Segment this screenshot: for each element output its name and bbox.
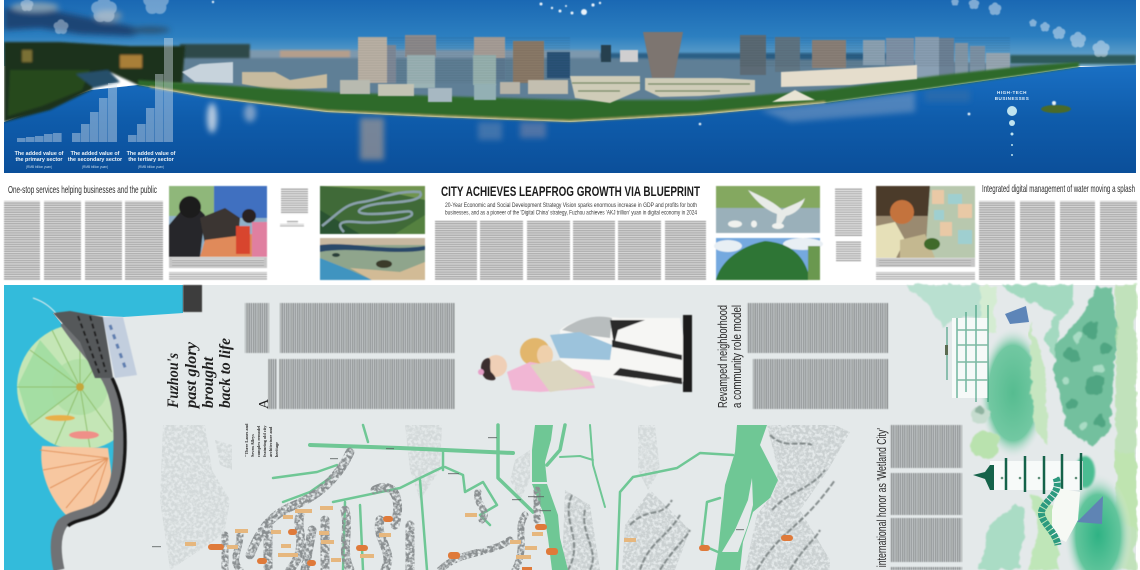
map: pale sketched hills [160,425,660,570]
icons: sparkle cluster at top centre [212,1,601,15]
watercolour: right edge grass strip [1116,285,1136,570]
watercolour: forest island [1055,287,1118,447]
photo: banyan tree [714,238,823,280]
text block: water management article columns [979,201,1137,280]
photo: clouds [4,2,170,36]
drop cap: A [257,398,272,409]
heading: revamped neighborhood: Revamped neighborhood [715,305,730,408]
photo: low-rise buildings left [182,62,327,90]
map: orange district labels [208,516,793,570]
watercolour: pale reed strip [1030,320,1048,445]
chart: high-tech businesses bubbles: HIGH-TECH [997,90,1027,95]
photo: egrets in a wetland [716,186,820,233]
text block: headline deck: businesses, and as a pioneer of the 'Digital China' strategy, Fuzhou achieves 'AKJ trillion' yuan in digital economy in 2024 [445,210,698,216]
icons: flower data markers, left [21,0,169,34]
chart: high-tech businesses bubbles: BUSINESSES [995,96,1029,101]
icon: orange parasol [40,446,112,517]
photo: coastal bay aerial [320,238,425,280]
text block: Three Lanes pull quote: complex remodel [256,425,261,457]
text block: paper craft credit [876,272,975,280]
photo: sky [4,0,1136,66]
icon: blue banner one [1005,306,1029,324]
text block: Three Lanes pull quote [244,423,279,457]
text block: revamped neighborhood article [747,303,888,409]
photo: far skyline [180,44,1136,65]
text block: Three Lanes pull quote: Seven Alleys [250,434,255,457]
watercolour: middle pale bushes [971,405,999,459]
illustration: temple hall [945,305,988,402]
chart: added value of the tertiary sector [127,38,176,169]
chart: added value of the primary sector: the primary sector [15,157,63,163]
map: green waterways [273,425,733,570]
map: tiny place name ticks [152,437,744,547]
photo: people at a service counter [169,186,267,257]
photo: mid-distance city behind the waterfront [180,56,1046,102]
photo: left forest [4,42,185,122]
watercolour: upper pale washes [905,285,1073,360]
chart: added value of the secondary sector: The added value of [71,151,120,157]
photo: waterfront towers [358,32,1010,88]
chart: added value of the primary sector: The added value of [15,151,64,157]
illustration: watercolour wetland landscape [905,285,1136,570]
heading: Fuzhou's past glory brought back to life: Fuzhou's [165,353,182,409]
chart: added value of the tertiary sector: (RMB billion yuan) [138,165,164,169]
heading: revamped neighborhood: a community role model [729,305,744,408]
text block: Three Lanes pull quote: "Three Lanes and [244,423,249,457]
chart: added value of the secondary sector [68,83,123,169]
text block: Three Lanes pull quote: heritage [274,442,279,457]
illustration: arched bridge [1041,478,1058,545]
panel background [4,285,1136,570]
map: mountains base shading [562,425,850,570]
caption: paper craft photo [876,258,975,267]
photo: river water [4,65,1136,173]
text block: Fuzhou's past glory article [245,303,455,409]
photo: winding road aerial [320,186,425,234]
illustration: mother and child figures [478,315,692,392]
text block: one-stop services article columns [4,201,163,280]
text block: pull quote and attribution [835,188,862,262]
text block: main article columns [435,221,706,280]
heading: revamped neighborhood [715,305,744,408]
chart: added value of the primary sector [15,133,64,169]
map: river island [722,478,753,552]
chart: high-tech businesses bubbles [995,90,1029,156]
chart: added value of the secondary sector: (RMB billion yuan) [82,165,108,169]
heading: Fuzhou's past glory brought back to life [165,338,234,410]
chart: added value of the secondary sector: the secondary sector [68,157,123,163]
caption: service counter photo [169,257,267,268]
panel: teal wall backdrop [4,285,183,570]
photo: small island and swans [699,101,1071,125]
icon: blue banner two [1077,496,1103,524]
photo: shoreline trees and embankment [138,62,1079,122]
photo: low-rise terraces [340,65,917,103]
icon: grey tiled wall curve [33,285,202,570]
map: Fuzhou waterways and old city [152,425,850,570]
map: inked mountain ridges [568,435,835,570]
text block: Three Lanes pull quote: architecture and [268,426,273,457]
photo: woman making paper crafts [876,186,975,258]
icons: flower data markers, right [951,0,1110,57]
panel: rotated heritage and wetland spread [4,285,1136,570]
text block: photo credit [169,272,267,280]
chart: added value of the tertiary sector: The added value of [127,151,176,157]
map: tan place labels [185,506,636,562]
text block: wetland city article [890,425,962,570]
heading: main front-page headline: CITY ACHIEVES LEAPFROG GROWTH VIA BLUEPRINT [441,183,700,199]
panel: skyline photo with economic charts [4,0,1136,173]
illustration: white pagoda [973,453,1083,494]
text block: Three Lanes pull quote: featuring old city [262,425,267,457]
text block: pull quote [280,188,308,226]
icon: green parasol with fish [16,326,114,448]
map: old city building clusters [225,452,537,570]
heading: international honor as Wetland City: s international honor as 'Wetland City' [875,428,889,570]
heading: one-stop services: One-stop services helping businesses and the public [8,184,157,196]
chart: added value of the tertiary sector: the tertiary sector [128,157,175,163]
photo: reflections on the water [207,90,970,160]
heading: Fuzhou's past glory brought back to life: back to life [217,338,234,408]
chart: added value of the primary sector: (RMB billion yuan) [26,165,52,169]
text block: headline deck: 20-Year Economic and Social Development Strategy Vision sparks enormous increase in GDP and profits for both [445,203,697,209]
watercolour: white courtyard [1052,488,1080,542]
watercolour: lower lakes and shore [980,450,1136,570]
heading: Fuzhou's past glory brought back to life: past glory [183,342,200,410]
text block: headline deck [445,203,698,216]
watercolour: wetland lake [979,327,1047,459]
heading: Fuzhou's past glory brought back to life: brought [200,356,217,408]
map: Min River channels [532,425,778,570]
